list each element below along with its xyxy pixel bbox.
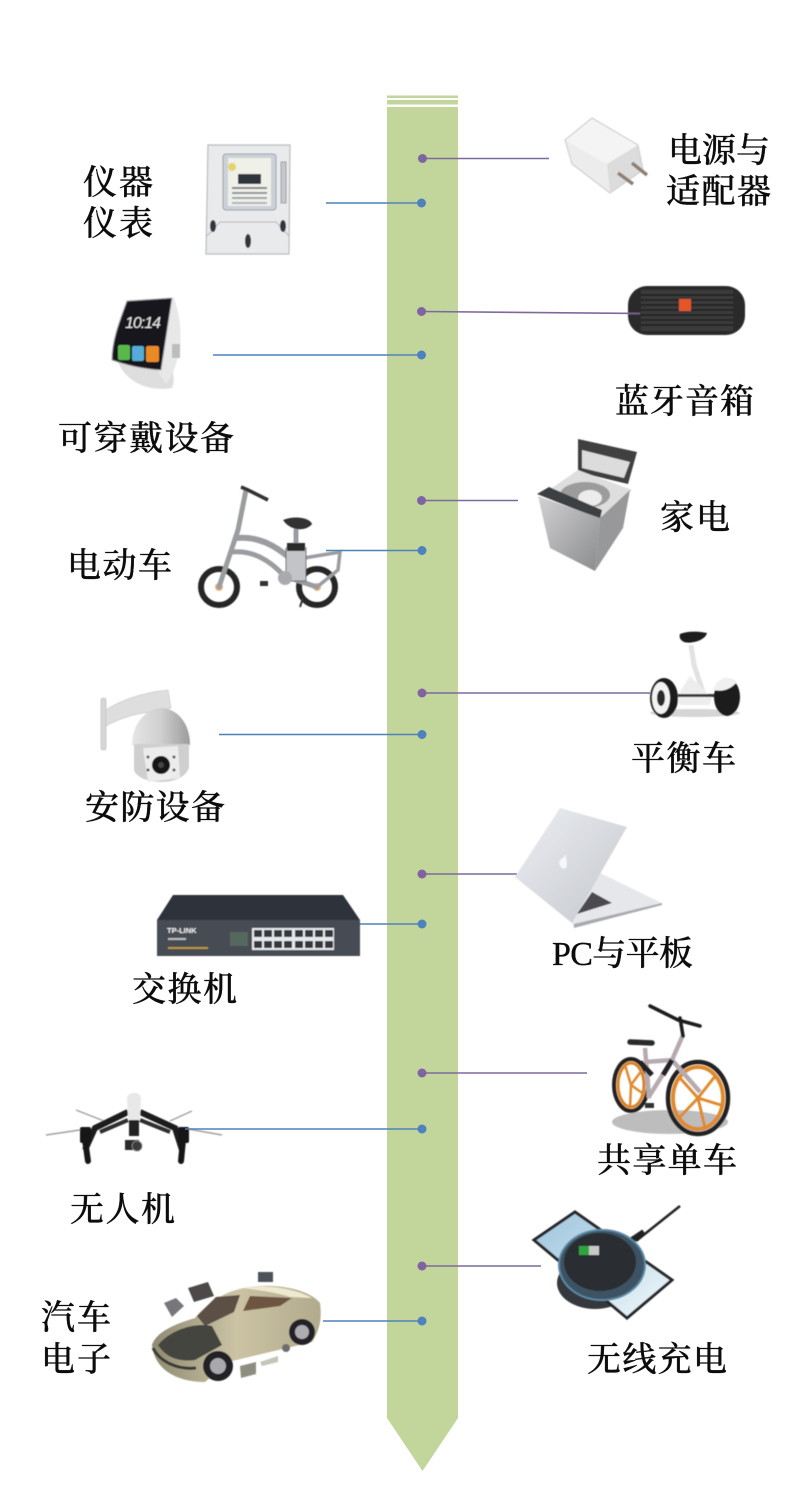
label: 电源与适配器: 电源与 (668, 132, 770, 170)
label: 平衡车: 平衡车 (631, 740, 736, 778)
icon: bluetooth speaker (628, 286, 745, 335)
connector: 仪器仪表 (326, 198, 426, 208)
item: 蓝牙音箱 (417, 286, 754, 421)
connector: 蓝牙音箱 (422, 312, 640, 314)
icon: shared bike (612, 1006, 728, 1134)
icon: wireless charger (534, 1206, 680, 1318)
label: 可穿戴设备: 可穿戴设备 (58, 420, 234, 458)
label: 电源与适配器: 适配器 (666, 173, 771, 211)
item: 平衡车 (418, 632, 740, 778)
icon: electric bike (201, 487, 340, 607)
label: 共享单车: 共享单车 (597, 1142, 737, 1180)
connector: 安防设备 (219, 730, 426, 739)
connector: 无线充电 (418, 1262, 541, 1270)
item: 无线充电 (418, 1206, 727, 1379)
icon: electric meter (206, 145, 290, 254)
icon: car electronics (152, 1272, 321, 1382)
icon: self-balancing scooter (650, 632, 740, 718)
item: 电源与适配器 (418, 118, 771, 211)
label: 无线充电: 无线充电 (587, 1341, 727, 1379)
connector: 家电 (417, 496, 518, 505)
label: 交换机: 交换机 (132, 971, 237, 1009)
label: 电动车: 电动车 (67, 547, 172, 585)
item: 交换机 (132, 895, 426, 1009)
connector: PC与平板 (418, 870, 517, 878)
label: 汽车电子: 汽车 (41, 1299, 111, 1337)
connector: 可穿戴设备 (213, 350, 426, 360)
label: 家电: 家电 (660, 499, 730, 537)
label: 汽车电子 (41, 1299, 111, 1379)
connector: 无人机 (185, 1124, 426, 1134)
icon: drone (46, 1093, 222, 1161)
connector: 平衡车 (418, 688, 650, 698)
label: 仪器仪表: 仪表 (83, 205, 153, 243)
watch face time: 10:14 (125, 315, 161, 332)
connector: 电动车 (326, 546, 426, 555)
label: 无人机: 无人机 (70, 1191, 175, 1229)
connector: 电源与适配器 (418, 154, 549, 163)
icon: washing machine (537, 439, 637, 571)
label: 汽车电子: 电子 (41, 1341, 111, 1379)
connector: 汽车电子 (323, 1316, 426, 1326)
label: PC与平板: PC与平板 (552, 935, 693, 973)
icon: network switch (157, 895, 360, 956)
label: 电源与适配器 (666, 132, 771, 211)
item: 汽车电子 (41, 1272, 426, 1382)
item: 家电 (417, 439, 730, 571)
icon: smart watch (112, 298, 181, 389)
label: 蓝牙音箱: 蓝牙音箱 (615, 383, 754, 421)
item: 可穿戴设备 (58, 298, 426, 458)
item: 仪器仪表 (83, 145, 426, 254)
label: 仪器仪表: 仪器 (83, 164, 153, 202)
central timeline arrow (387, 96, 458, 1471)
label: 安防设备: 安防设备 (85, 789, 225, 827)
item: 无人机 (46, 1093, 426, 1229)
item: 安防设备 (85, 690, 426, 827)
item: PC与平板 (418, 808, 693, 973)
connector: 共享单车 (418, 1068, 587, 1078)
item: 共享单车 (418, 1006, 737, 1180)
icon: security camera (101, 690, 190, 782)
label: 仪器仪表 (83, 164, 153, 243)
connector: 交换机 (358, 920, 426, 928)
icon: laptop (515, 808, 662, 928)
item: 电动车 (67, 487, 426, 607)
icon: power adapter (565, 118, 647, 193)
brand mark: TP-LINK (167, 926, 197, 935)
